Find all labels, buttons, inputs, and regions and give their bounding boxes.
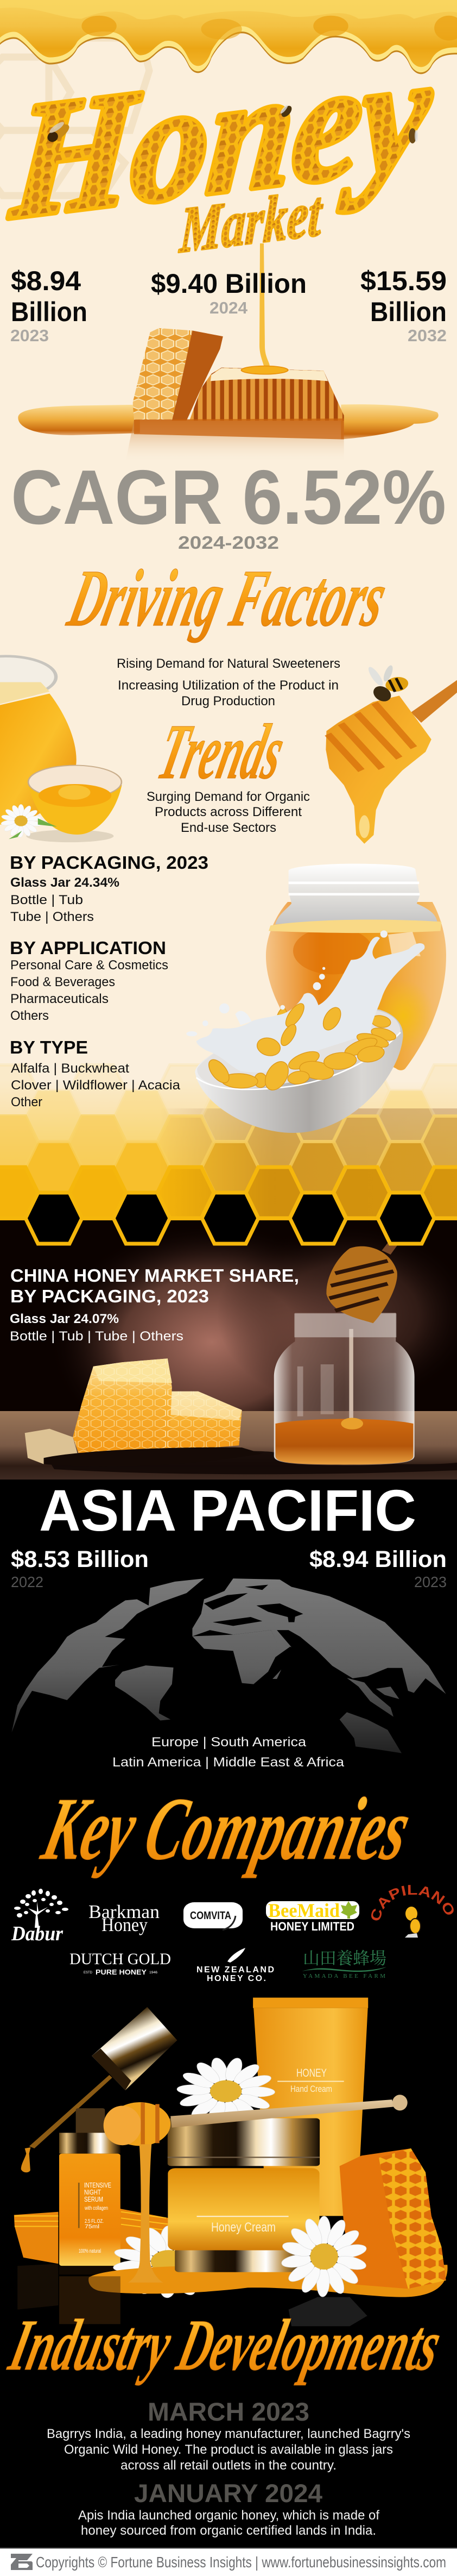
China market share text: Glass Jar 24.07% xyxy=(10,1312,119,1326)
logo: BeeMaid: HONEY LIMITED xyxy=(270,1920,354,1933)
stat: 2024 market size xyxy=(151,268,307,317)
heading: Trends: Trends xyxy=(150,708,293,795)
illustration: cosmetics xyxy=(14,1998,448,2326)
segment: by application: Others xyxy=(10,1008,49,1023)
other regions list xyxy=(112,1735,345,1770)
cosmetic labels: with collagen xyxy=(84,2205,108,2211)
stat: Asia Pacific 2022: 2022 xyxy=(11,1574,43,1590)
left daisy xyxy=(112,2226,226,2298)
illustration: honey jar and bowl xyxy=(0,656,122,842)
daisy top xyxy=(168,2051,284,2132)
logo: Dabur: Dabur xyxy=(11,1922,64,1945)
stat: 2024 market size: 2024 xyxy=(210,298,248,317)
cosmetic labels: Honey Cream xyxy=(211,2220,276,2235)
logo: Comvita xyxy=(183,1902,243,1930)
driving factors list: Increasing Utilization of the Product in xyxy=(118,678,339,693)
stat: 2023 market size: $8.94 xyxy=(11,266,81,296)
stat: 2023 market size: 2023 xyxy=(10,326,49,345)
trends text: Surging Demand for Organic xyxy=(147,789,310,804)
segment: by application xyxy=(10,938,168,1023)
segment: by packaging xyxy=(10,853,208,924)
logo: Yamada Bee Farm: YAMADA BEE FARM xyxy=(303,1973,385,1979)
stat: 2032 market size: Billion xyxy=(370,297,447,327)
China market share text: Bottle | Tub | Tube | Others xyxy=(10,1329,183,1344)
development: March 2023: across all retail outlets in the country. xyxy=(120,2458,337,2473)
development: March 2023 xyxy=(47,2397,410,2473)
honey cream jar xyxy=(168,2119,320,2272)
segment: by packaging: Tube | Others xyxy=(10,910,94,924)
development: March 2023: Bagrrys India, a leading honey manufacturer, launched Bagrry's xyxy=(47,2427,410,2441)
logo: Barkman Honey: Honey xyxy=(101,1914,148,1935)
segment: by packaging: BY PACKAGING, 2023 xyxy=(10,853,208,873)
China market share text: CHINA HONEY MARKET SHARE, xyxy=(10,1265,299,1286)
segment: by type: Clover | Wildflower | Acacia xyxy=(11,1078,181,1093)
segment: by packaging: Glass Jar 24.34% xyxy=(10,875,119,890)
stat: 2023 market size: Billion xyxy=(11,297,87,327)
hex band cells xyxy=(0,1065,457,1220)
stat: 2024 market size: $9.40 Billion xyxy=(151,268,307,299)
black hex cells and outlines xyxy=(0,1065,457,1244)
development: January 2024: Apis India launched organic honey, which is made of xyxy=(78,2508,379,2523)
stat: 2023 market size xyxy=(10,266,87,345)
honey puddle xyxy=(88,2265,448,2297)
heading: Asia Pacific: ASIA PACIFIC xyxy=(39,1477,416,1543)
illustration: milk jar xyxy=(266,864,446,1070)
logo: Yamada Bee Farm xyxy=(302,1949,386,1979)
logo: BeeMaid xyxy=(266,1900,359,1933)
logo: Dutch Gold: ESTD xyxy=(84,1971,93,1975)
cosmetic labels: NIGHT xyxy=(84,2188,101,2196)
stat: Asia Pacific 2023 xyxy=(309,1546,447,1590)
logo: Capilano: CAPILANO xyxy=(371,1885,454,1920)
CAGR period: 2024-2032 xyxy=(178,532,279,553)
logo: New Zealand Honey Co: NEW ZEALAND xyxy=(196,1965,274,1975)
icon: Fortune Business Insights logo xyxy=(11,2554,33,2570)
trends text: Products across Different xyxy=(155,805,302,819)
other regions list: Europe | South America xyxy=(151,1735,307,1750)
stat: Asia Pacific 2023: 2023 xyxy=(414,1574,447,1590)
logo: Barkman Honey: Barkman xyxy=(88,1901,160,1922)
illustration: honeycomb in puddle xyxy=(18,328,439,463)
logo: BeeMaid: BeeMaid xyxy=(268,1900,340,1921)
dipper and stream xyxy=(104,2095,408,2283)
segment: by type: Other xyxy=(11,1095,42,1110)
cosmetic labels: Hand Cream xyxy=(290,2084,332,2094)
development: January 2024 xyxy=(78,2479,379,2538)
driving factors list: Rising Demand for Natural Sweeteners xyxy=(117,656,340,671)
illustration: cereal bowl with milk splash xyxy=(186,930,424,1133)
development: January 2024: JANUARY 2024 xyxy=(134,2479,322,2508)
honey stream xyxy=(259,243,270,367)
cosmetic labels: 100% natural xyxy=(79,2248,101,2254)
stat: 2032 market size xyxy=(360,266,447,345)
right comb xyxy=(340,2148,446,2289)
reflection xyxy=(17,2264,367,2326)
stat: Asia Pacific 2022 xyxy=(11,1546,149,1590)
logo: Dutch Gold: DUTCH GOLD xyxy=(69,1950,171,1968)
logo: Capilano xyxy=(371,1885,454,1938)
cosmetic labels: 75ml xyxy=(85,2224,99,2230)
stat: Asia Pacific 2023: $8.94 Billion xyxy=(309,1546,447,1572)
logo: New Zealand Honey Co: HONEY CO. xyxy=(207,1974,266,1983)
logo: Dabur xyxy=(11,1889,68,1945)
segment: by application: Food & Beverages xyxy=(10,975,115,989)
China market share text: BY PACKAGING, 2023 xyxy=(10,1286,209,1306)
honey dipper photo xyxy=(326,1199,428,1323)
icon: bees on title xyxy=(43,103,418,145)
cosmetic labels: HONEY xyxy=(296,2067,327,2079)
cosmetic labels: 2.5 FL.OZ. xyxy=(85,2218,104,2224)
honeycomb photo xyxy=(25,1358,262,1466)
daisy bottom xyxy=(281,2216,367,2297)
hex band background xyxy=(0,1081,457,1220)
segment: by application: Pharmaceuticals xyxy=(10,992,109,1006)
segment: by application: BY APPLICATION xyxy=(10,938,166,958)
black Asia Pacific backdrop xyxy=(0,1480,457,2548)
trends text: End-use Sectors xyxy=(181,820,276,835)
honey drips across top xyxy=(0,0,457,74)
glass jar photo xyxy=(274,1313,415,1465)
left comb xyxy=(14,2209,169,2264)
trends text xyxy=(147,789,310,835)
background: cream upper section xyxy=(0,0,457,1220)
development: March 2023: Organic Wild Honey. The product is available in glass jars xyxy=(64,2442,393,2457)
logo: Dutch Gold: PURE HONEY xyxy=(96,1968,147,1976)
logo: New Zealand Honey Co xyxy=(196,1948,274,1983)
logo: Comvita: COMVITA xyxy=(190,1910,231,1922)
segment: by type: Alfalfa | Buckwheat xyxy=(11,1061,129,1076)
driving factors list xyxy=(117,656,340,709)
stat: Asia Pacific 2022: $8.53 Billion xyxy=(11,1546,149,1572)
title: Market: Market xyxy=(177,177,325,266)
development: March 2023: MARCH 2023 xyxy=(148,2397,309,2426)
background honeycomb top-left xyxy=(0,38,149,196)
globe map xyxy=(11,1578,446,1753)
logo: Dutch Gold xyxy=(69,1950,171,1976)
serum bottle xyxy=(59,2108,120,2274)
driving factors list: Drug Production xyxy=(181,694,275,709)
logo: Barkman Honey xyxy=(88,1901,160,1935)
logo: Yamada Bee Farm: 山田養蜂場 xyxy=(303,1949,386,1968)
footer bar xyxy=(0,2548,457,2576)
title: Honey: Honey xyxy=(4,18,439,254)
segment: by packaging: Bottle | Tub xyxy=(10,893,83,907)
China photo section xyxy=(0,1199,457,1480)
other regions list: Latin America | Middle East & Africa xyxy=(112,1755,345,1770)
segment: by type: BY TYPE xyxy=(10,1037,88,1057)
dropper cap xyxy=(21,2007,177,2172)
background: black lower section xyxy=(0,1220,457,2576)
China market share text xyxy=(10,1265,299,1344)
stat: 2032 market size: $15.59 xyxy=(360,266,447,296)
stat: 2032 market size: 2032 xyxy=(408,326,447,345)
logo: Dutch Gold: 1946 xyxy=(149,1971,158,1975)
cosmetic labels: INTENSIVE xyxy=(84,2181,111,2189)
cosmetic labels xyxy=(79,2067,332,2254)
segment: by type xyxy=(10,1037,181,1110)
illustration: honey dipper with bee xyxy=(326,659,457,844)
development: January 2024: honey sourced from organic certified lands in India. xyxy=(81,2523,376,2538)
segment: by application: Personal Care & Cosmetics xyxy=(10,958,168,973)
hand cream tube xyxy=(253,1998,368,2216)
cosmetic labels: SERUM xyxy=(84,2195,103,2203)
